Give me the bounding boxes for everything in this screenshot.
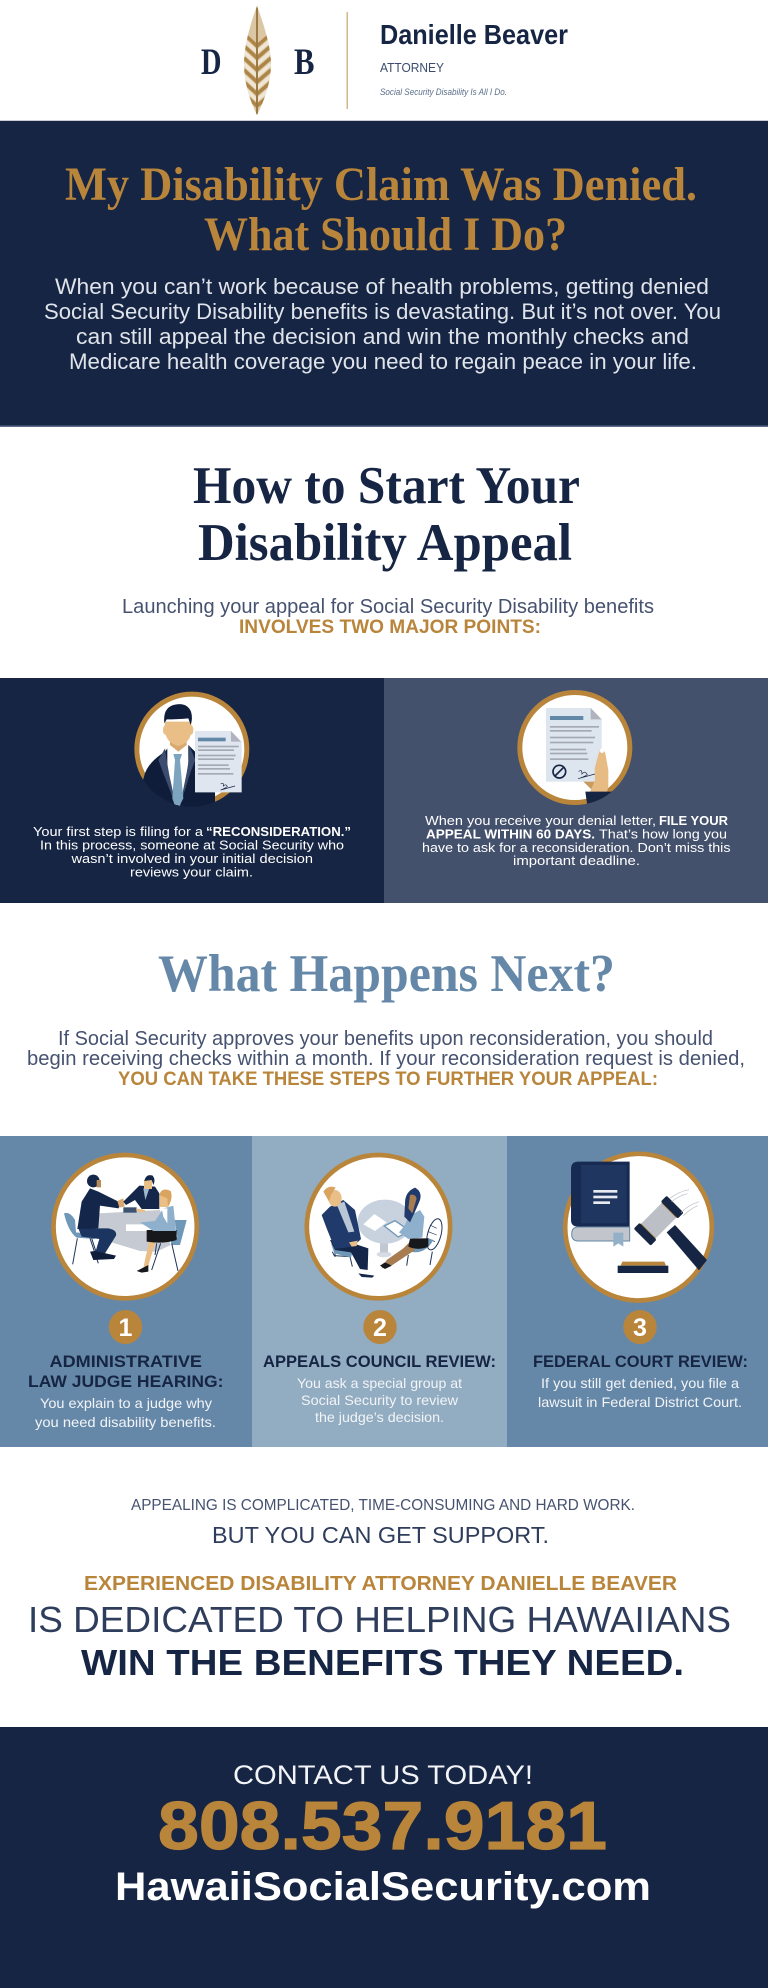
step 2 description: Social Security to review bbox=[301, 1392, 459, 1408]
panel: contact bbox=[0, 1727, 768, 1988]
panel: 60-day deadline bbox=[384, 678, 768, 903]
text block: deadline: That’s how long you bbox=[599, 826, 727, 842]
text block: reconsideration step: wasn’t involved in your initial decision bbox=[70, 851, 313, 866]
text block: deadline: important deadline. bbox=[513, 853, 640, 868]
text block: deadline: have to ask for a reconsideration. Don’t miss this bbox=[422, 840, 731, 855]
title: My Disability Claim Was Denied. bbox=[65, 158, 697, 211]
logo tagline: Social Security Disability Is All I Do. bbox=[380, 87, 507, 98]
text block: win the benefits: WIN THE BENEFITS THEY NEED. bbox=[81, 1642, 684, 1683]
text block: reconsideration step: In this process, someone at Social Security who bbox=[40, 838, 344, 852]
text block: dedicated to helping: IS DEDICATED TO HELPING HAWAIIANS bbox=[28, 1599, 731, 1640]
text block: next steps: YOU CAN TAKE THESE STEPS TO FURTHER YOUR APPEAL: bbox=[118, 1069, 658, 1090]
heading: How to Start Your bbox=[193, 457, 580, 515]
text block: deadline: APPEAL WITHIN 60 DAYS. bbox=[426, 826, 595, 842]
panel: intro banner bbox=[0, 120, 768, 427]
panel: step 2 appeals council review bbox=[252, 1136, 507, 1447]
step 1 description: you need disability benefits. bbox=[35, 1414, 216, 1430]
step 1 heading: LAW JUDGE HEARING: bbox=[28, 1373, 224, 1391]
text block: reconsideration step: reviews your claim. bbox=[130, 864, 253, 880]
text block: get support: BUT YOU CAN GET SUPPORT. bbox=[212, 1522, 549, 1548]
panel: reconsideration bbox=[0, 678, 384, 903]
text block: experienced attorney: EXPERIENCED DISABILITY ATTORNEY DANIELLE BEAVER bbox=[84, 1573, 678, 1595]
step 1 heading bbox=[28, 1353, 224, 1391]
step number 2: 2 bbox=[373, 1314, 387, 1342]
logo name: Danielle Beaver bbox=[380, 19, 568, 50]
step 2 description: You ask a special group at bbox=[297, 1375, 462, 1391]
heading bbox=[193, 457, 580, 572]
intro paragraph bbox=[44, 274, 721, 374]
step 3 description bbox=[538, 1375, 742, 1410]
header: logo bbox=[201, 6, 568, 115]
heading: Disability Appeal bbox=[198, 514, 572, 572]
icon: denial letter in hand bbox=[520, 692, 630, 806]
icon: feather leaf bbox=[244, 6, 271, 115]
step number 2 bbox=[363, 1310, 397, 1344]
text block: reconsideration step: “RECONSIDERATION.” bbox=[206, 824, 351, 839]
icon: meeting at table bbox=[53, 1155, 197, 1298]
contact heading: CONTACT US TODAY! bbox=[233, 1760, 533, 1790]
intro paragraph: can still appeal the decision and win the monthly checks and bbox=[76, 324, 689, 349]
text block: launching appeal: Launching your appeal for Social Security Disability benefits bbox=[122, 596, 654, 618]
text block: two major points: INVOLVES TWO MAJOR POINTS: bbox=[239, 617, 541, 638]
intro paragraph: Social Security Disability benefits is devastating. But it’s not over. You bbox=[44, 299, 721, 324]
website: HawaiiSocialSecurity.com bbox=[115, 1865, 651, 1909]
step 2 heading: APPEALS COUNCIL REVIEW: bbox=[263, 1353, 496, 1371]
text block: deadline: FILE YOUR bbox=[659, 813, 729, 828]
logo subtitle: ATTORNEY bbox=[380, 61, 445, 75]
step number 1 bbox=[109, 1310, 142, 1344]
intro paragraph: When you can’t work because of health problems, getting denied bbox=[55, 274, 709, 299]
step number 3: 3 bbox=[633, 1314, 647, 1342]
text block: appealing is complicated: APPEALING IS COMPLICATED, TIME-CONSUMING AND HARD WORK. bbox=[131, 1497, 635, 1514]
step 1 description: You explain to a judge why bbox=[40, 1395, 212, 1411]
text block: reconsideration step: Your first step is filing for a bbox=[33, 824, 204, 839]
text block: reconsideration step bbox=[33, 824, 351, 880]
heading: What Happens Next? bbox=[158, 945, 615, 1003]
step number 3 bbox=[623, 1310, 657, 1344]
text block: next steps: begin receiving checks within a month. If your reconsideration request is denied, bbox=[27, 1048, 745, 1070]
panel: what happens next bbox=[27, 945, 745, 1090]
panel: step 1 administrative law judge hearing bbox=[0, 1136, 252, 1447]
title: What Should I Do? bbox=[204, 208, 567, 261]
step 1 heading: ADMINISTRATIVE bbox=[50, 1353, 202, 1371]
icon: law book and gavel bbox=[565, 1154, 712, 1300]
icon: two people at round table bbox=[307, 1155, 450, 1298]
logo monogram letter B: B bbox=[294, 42, 314, 83]
text block: deadline: When you receive your denial letter, bbox=[425, 813, 656, 828]
panel: step 3 federal court review bbox=[507, 1136, 768, 1447]
step 3 description: lawsuit in Federal District Court. bbox=[538, 1394, 742, 1410]
panel: support message bbox=[28, 1497, 731, 1683]
phone number: 808.537.9181 bbox=[158, 1788, 607, 1864]
step 1 description bbox=[35, 1395, 216, 1430]
title bbox=[65, 158, 697, 261]
text block: next steps bbox=[27, 1028, 745, 1090]
step 2 description bbox=[297, 1375, 462, 1425]
step 3 heading: FEDERAL COURT REVIEW: bbox=[533, 1353, 748, 1371]
icon: attorney holding document bbox=[133, 694, 247, 813]
step number 1: 1 bbox=[119, 1314, 133, 1342]
text block: next steps: If Social Security approves your benefits upon reconsideration, you should bbox=[58, 1028, 713, 1050]
panel: how to start bbox=[122, 457, 654, 638]
logo monogram letter D: D bbox=[201, 42, 222, 83]
step 2 description: the judge’s decision. bbox=[315, 1409, 444, 1425]
step 3 description: If you still get denied, you file a bbox=[541, 1375, 739, 1391]
intro paragraph: Medicare health coverage you need to regain peace in your life. bbox=[69, 349, 697, 374]
text block: deadline bbox=[422, 813, 731, 868]
